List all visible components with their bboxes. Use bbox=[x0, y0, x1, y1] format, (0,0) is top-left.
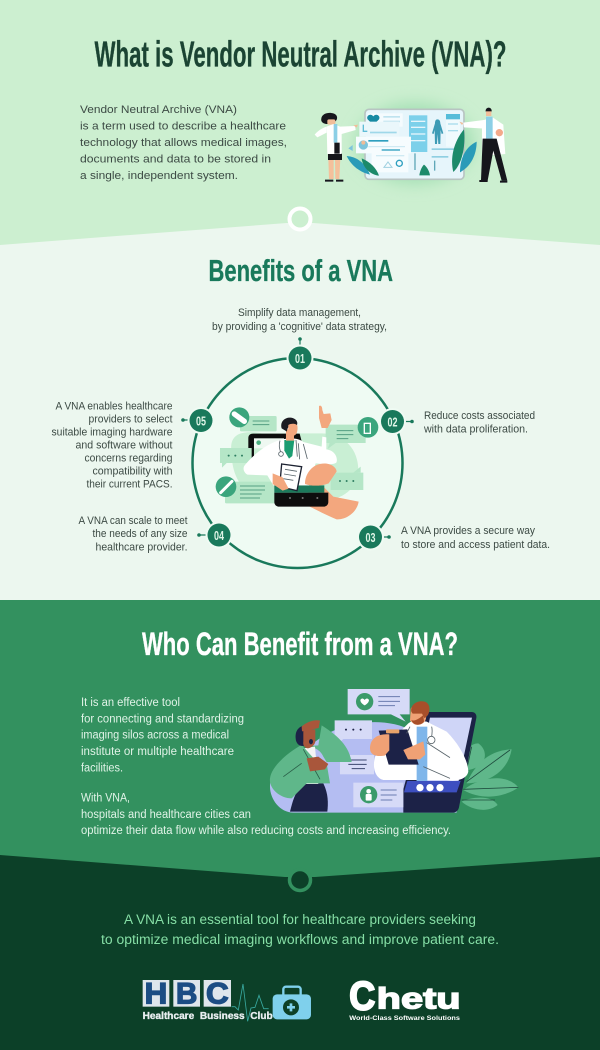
text: benefit 04: the needs of any size bbox=[92, 528, 188, 540]
node 04: 04 bbox=[214, 528, 225, 543]
node 03 bbox=[357, 524, 384, 550]
illustration: doctor consulting patient via tablet bbox=[270, 689, 518, 813]
node 02: 02 bbox=[388, 414, 398, 430]
logo: Healthcare Business Club bbox=[143, 977, 311, 1022]
text: benefit 05: A VNA enables healthcare bbox=[56, 400, 172, 412]
pointing hand bbox=[319, 406, 332, 428]
big hand palm bbox=[308, 487, 359, 519]
thumb bbox=[305, 463, 337, 486]
text: benefit 03 bbox=[401, 525, 550, 551]
node 01 bbox=[286, 344, 314, 372]
text block: description: optimize their data flow while also reducing costs and increasing efficiency. bbox=[81, 825, 451, 837]
text block: definition: Vendor Neutral Archive (VNA) bbox=[80, 104, 237, 116]
bubbles bbox=[348, 689, 410, 722]
text: benefit 04: healthcare provider. bbox=[96, 542, 188, 554]
connector ring top bbox=[290, 208, 310, 230]
conclusion text: A VNA is an essential tool for healthcare providers seeking bbox=[124, 912, 476, 927]
logo: Chetu: C bbox=[349, 974, 375, 1018]
right doctor bbox=[486, 108, 492, 114]
logo: Chetu: World-Class Software Solutions bbox=[349, 1015, 461, 1022]
logo: Healthcare Business Club: Healthcare Business Club bbox=[143, 1011, 273, 1022]
logo: Healthcare Business Club: H bbox=[145, 977, 167, 1010]
bubbles bbox=[240, 416, 277, 431]
text: benefit 02: Reduce costs associated bbox=[424, 410, 535, 422]
text: benefit 03: to store and access patient data. bbox=[401, 539, 550, 551]
illustration: doctors at a medical tablet bbox=[315, 103, 507, 183]
text: benefit 05: concerns regarding bbox=[84, 452, 172, 464]
text block: definition: documents and data to be stored in bbox=[80, 154, 271, 166]
diagram: benefits ring bbox=[181, 337, 414, 568]
text: benefit 05: suitable imaging hardware bbox=[52, 426, 172, 438]
panel: who can benefit bbox=[0, 600, 600, 890]
text: benefit 01 bbox=[212, 307, 387, 333]
text block: description: With VNA, bbox=[81, 792, 130, 804]
doctor bbox=[374, 720, 468, 781]
phone bbox=[274, 493, 328, 507]
leaves bbox=[467, 743, 485, 770]
illustration: doctor emerging from phone bbox=[216, 406, 378, 519]
text: benefit 03: A VNA provides a secure way bbox=[401, 525, 535, 537]
dots bubble bbox=[331, 473, 363, 490]
panel: what is VNA bbox=[0, 0, 600, 250]
text block: definition: a single, independent system. bbox=[80, 170, 238, 182]
text block: description: facilities. bbox=[81, 762, 123, 774]
node 02 bbox=[379, 408, 406, 435]
left doctor bbox=[321, 113, 337, 124]
text block: description: hospitals and healthcare cities can bbox=[81, 809, 251, 821]
text: benefit 05: their current PACS. bbox=[86, 478, 172, 490]
node 05 bbox=[188, 407, 214, 434]
node 05: 05 bbox=[196, 414, 206, 428]
text: benefit 05: providers to select bbox=[88, 414, 173, 426]
logo: Chetu bbox=[349, 974, 461, 1022]
text: benefit 05 bbox=[52, 400, 173, 490]
panel: conclusion bbox=[0, 855, 600, 1050]
conclusion text bbox=[101, 912, 499, 947]
text: benefit 02: with data proliferation. bbox=[423, 424, 528, 436]
text block: definition: technology that allows medical images, bbox=[80, 137, 287, 149]
logo: Healthcare Business Club: B bbox=[176, 977, 197, 1010]
text block: description: for connecting and standardizing bbox=[81, 714, 244, 726]
node 03: 03 bbox=[366, 530, 376, 545]
text block: definition: is a term used to describe a healthcare bbox=[80, 120, 286, 132]
text block: definition bbox=[80, 104, 287, 182]
connector ring bottom bbox=[290, 870, 310, 890]
text: benefit 04 bbox=[78, 515, 188, 554]
text: benefit 02 bbox=[423, 410, 535, 436]
logo: Chetu: hetu bbox=[377, 983, 461, 1016]
heading: Benefits of a VNA bbox=[208, 253, 393, 288]
patient bbox=[300, 725, 352, 762]
text: benefit 05: compatibility with bbox=[92, 466, 172, 478]
heading: Who Can Benefit from a VNA? bbox=[142, 626, 458, 662]
text block: description: It is an effective tool bbox=[81, 697, 180, 709]
tablet bbox=[403, 712, 476, 813]
blob bbox=[270, 722, 457, 813]
node 04 bbox=[206, 522, 232, 548]
panel: benefits of a VNA bbox=[0, 208, 600, 600]
conclusion text: to optimize medical imaging workflows and improve patient care. bbox=[101, 932, 499, 947]
text: benefit 04: A VNA can scale to meet bbox=[78, 515, 188, 527]
node 01: 01 bbox=[295, 351, 305, 366]
clipboard bbox=[280, 464, 302, 491]
doctor bbox=[244, 437, 337, 485]
text: benefit 01: Simplify data management, bbox=[238, 307, 361, 319]
text: benefit 01: by providing a 'cognitive' data strategy, bbox=[212, 321, 387, 333]
logo: Healthcare Business Club: C bbox=[206, 977, 229, 1010]
text: benefit 05: and software without bbox=[76, 439, 173, 451]
text block: description: institute or multiple healthcare bbox=[81, 746, 234, 758]
text block: description: imaging silos across a medical bbox=[81, 730, 229, 742]
text block: description bbox=[81, 697, 451, 837]
